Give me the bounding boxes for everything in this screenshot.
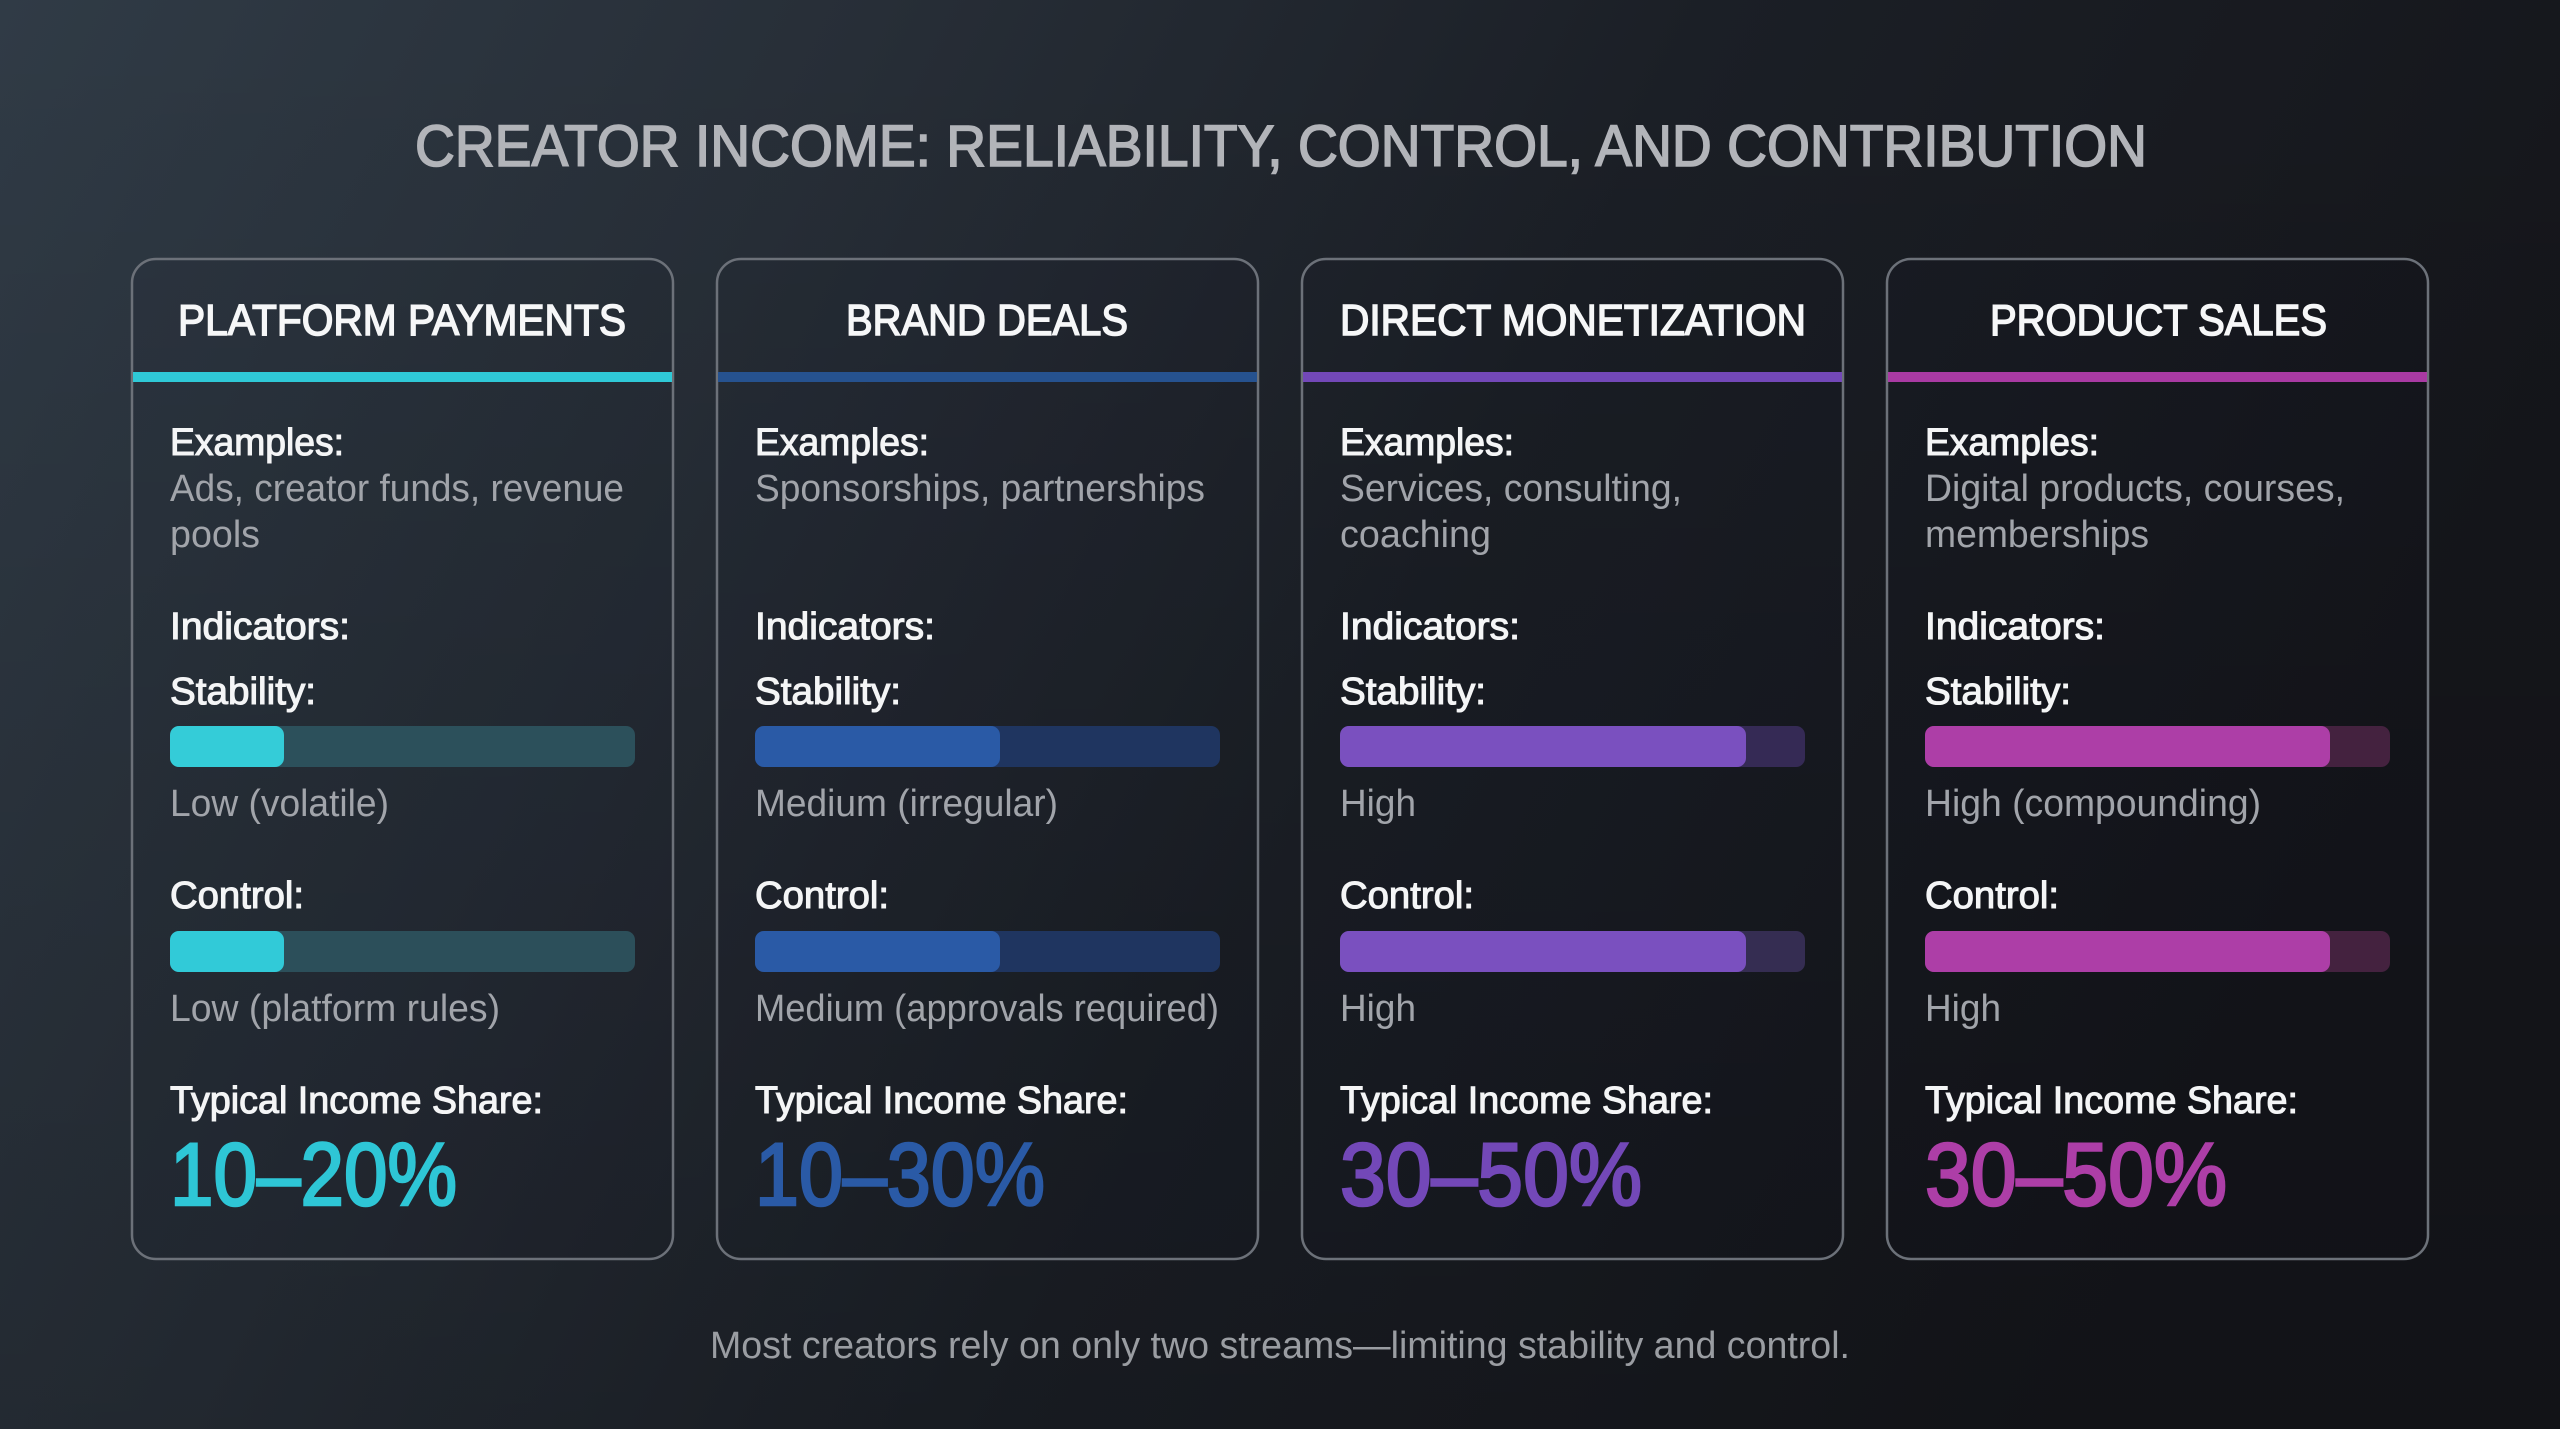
examples label: Examples: bbox=[755, 422, 929, 464]
stability bar bbox=[755, 726, 1220, 767]
control value: Low (platform rules) bbox=[170, 988, 500, 1030]
income share value: 10–30% bbox=[755, 1124, 1045, 1224]
income share value: 30–50% bbox=[1925, 1124, 2227, 1224]
title: CREATOR INCOME: RELIABILITY, CONTROL, AND CONTRIBUTION bbox=[415, 114, 2147, 179]
control value: High bbox=[1340, 988, 1416, 1030]
control value: High bbox=[1925, 988, 2001, 1030]
examples text: memberships bbox=[1925, 514, 2149, 556]
stability value: Low (volatile) bbox=[170, 783, 389, 825]
stability bar bbox=[1340, 726, 1805, 767]
examples text: Services, consulting, bbox=[1340, 468, 1682, 510]
control bar bbox=[1925, 931, 2390, 972]
control bar bbox=[170, 931, 635, 972]
control value: Medium (approvals required) bbox=[755, 988, 1219, 1030]
stability label: Stability: bbox=[170, 671, 316, 713]
stability label: Stability: bbox=[1925, 671, 2071, 713]
stability value: Medium (irregular) bbox=[755, 783, 1058, 825]
income share label: Typical Income Share: bbox=[1340, 1080, 1713, 1122]
examples text: Ads, creator funds, revenue bbox=[170, 468, 624, 510]
examples label: Examples: bbox=[1925, 422, 2099, 464]
panel: brand deals bbox=[717, 259, 1258, 1259]
income share value: 30–50% bbox=[1340, 1124, 1642, 1224]
control bar bbox=[755, 931, 1220, 972]
examples text: Sponsorships, partnerships bbox=[755, 468, 1205, 510]
footer note: Most creators rely on only two streams—limiting stability and control. bbox=[710, 1325, 1850, 1367]
heading: direct monetization: DIRECT MONETIZATION bbox=[1340, 296, 1806, 345]
examples label: Examples: bbox=[1340, 422, 1514, 464]
stability bar bbox=[1925, 726, 2390, 767]
income share value: 10–20% bbox=[170, 1124, 457, 1224]
control label: Control: bbox=[1340, 875, 1474, 917]
accent line bbox=[718, 372, 1257, 382]
income share label: Typical Income Share: bbox=[755, 1080, 1128, 1122]
panel: direct monetization bbox=[1302, 259, 1843, 1259]
examples text: coaching bbox=[1340, 514, 1491, 556]
control label: Control: bbox=[170, 875, 304, 917]
panel: platform payments bbox=[132, 259, 673, 1259]
examples label: Examples: bbox=[170, 422, 344, 464]
control bar bbox=[1340, 931, 1805, 972]
accent line bbox=[1888, 372, 2427, 382]
accent line bbox=[1303, 372, 1842, 382]
stability value: High bbox=[1340, 783, 1416, 825]
heading: product sales: PRODUCT SALES bbox=[1990, 296, 2327, 345]
indicators label: Indicators: bbox=[170, 606, 350, 648]
examples text: Digital products, courses, bbox=[1925, 468, 2345, 510]
indicators label: Indicators: bbox=[1340, 606, 1520, 648]
stability label: Stability: bbox=[755, 671, 901, 713]
control label: Control: bbox=[1925, 875, 2059, 917]
control label: Control: bbox=[755, 875, 889, 917]
indicators label: Indicators: bbox=[755, 606, 935, 648]
panel: product sales bbox=[1887, 259, 2428, 1259]
heading: brand deals: BRAND DEALS bbox=[846, 296, 1128, 345]
examples text: pools bbox=[170, 514, 260, 556]
heading: platform payments: PLATFORM PAYMENTS bbox=[178, 296, 626, 345]
stability value: High (compounding) bbox=[1925, 783, 2261, 825]
stability bar bbox=[170, 726, 635, 767]
accent line bbox=[133, 372, 672, 382]
indicators label: Indicators: bbox=[1925, 606, 2105, 648]
income share label: Typical Income Share: bbox=[170, 1080, 543, 1122]
income share label: Typical Income Share: bbox=[1925, 1080, 2298, 1122]
stability label: Stability: bbox=[1340, 671, 1486, 713]
